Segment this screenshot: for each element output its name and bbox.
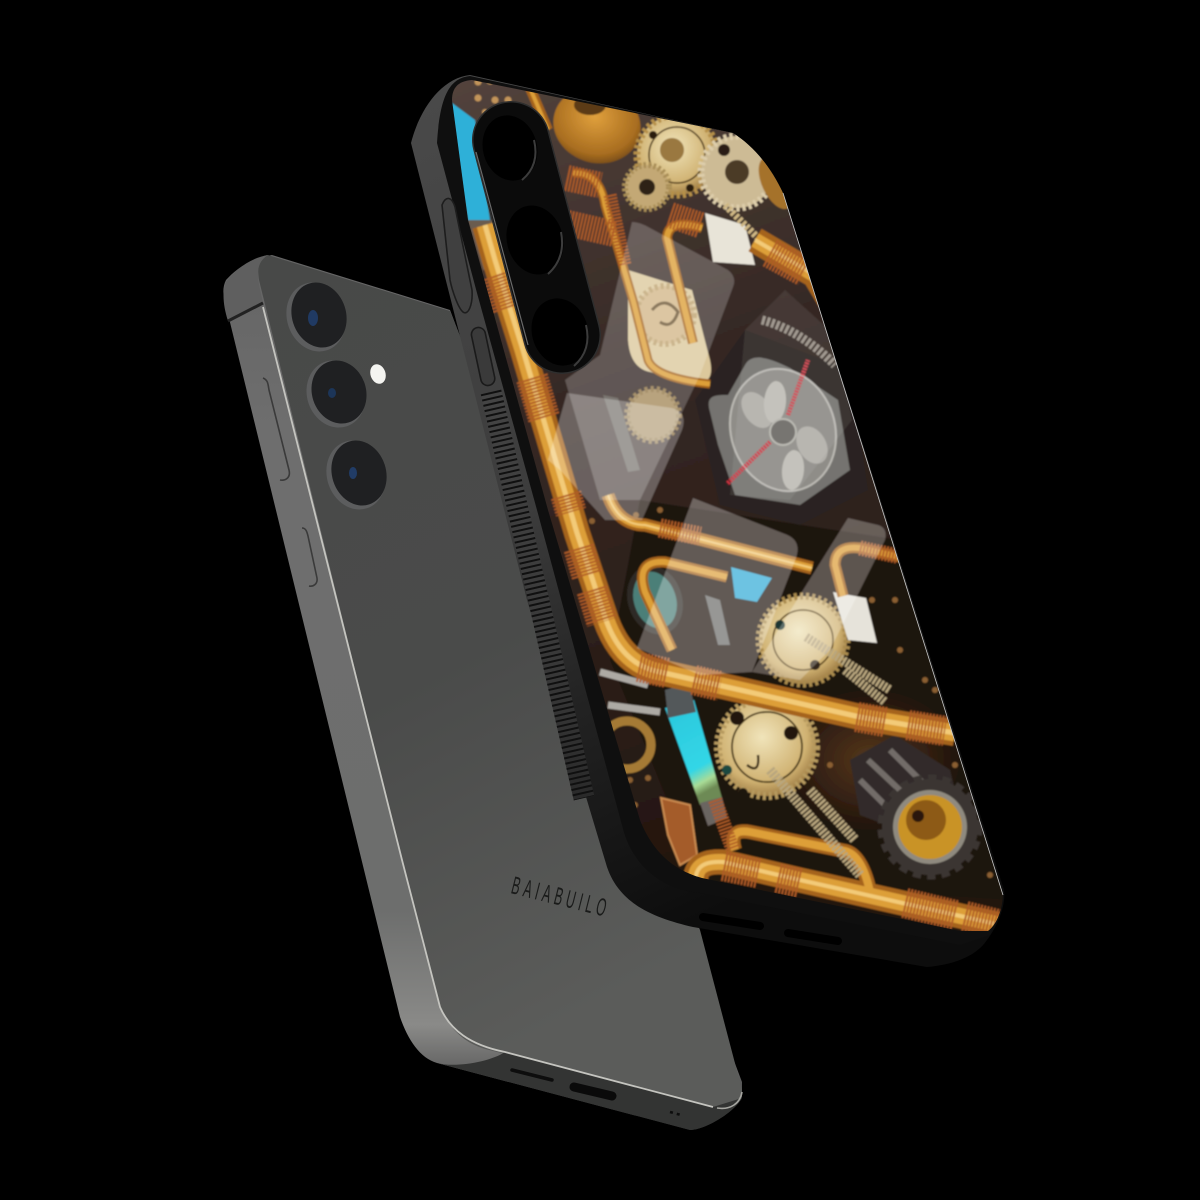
volume key — [263, 378, 289, 480]
antenna band — [228, 303, 263, 321]
small rivets top — [474, 80, 512, 114]
camera island — [475, 109, 596, 372]
upper right reflection — [730, 290, 852, 500]
camera lens 3 — [318, 433, 395, 517]
wheel spokes — [860, 750, 925, 815]
top frame corner shade — [224, 255, 268, 321]
corner gold patch — [758, 159, 788, 210]
small gear — [625, 165, 669, 209]
gear under reflection — [627, 389, 679, 441]
pipe highlight — [485, 225, 1005, 926]
fan — [728, 367, 838, 493]
fan housing shadow — [698, 331, 850, 526]
green mesh — [626, 567, 683, 634]
metal edge highlight — [263, 307, 713, 1107]
island left highlight — [476, 152, 528, 345]
camera hole 1 — [475, 109, 545, 187]
cream plate — [628, 270, 711, 383]
cream plate gear — [636, 286, 694, 344]
camera lens 1 — [278, 275, 355, 359]
white chip lower — [833, 592, 877, 643]
right phone: case front — [411, 70, 1030, 967]
artwork base — [452, 80, 1002, 931]
phone frame side — [223, 255, 742, 1130]
pipe mid tone — [485, 88, 1005, 926]
lower gear — [718, 698, 816, 798]
left phone: rear view — [223, 255, 742, 1130]
gold dome — [552, 98, 642, 164]
metal corner highlight — [717, 1092, 742, 1108]
charging port — [574, 1087, 612, 1096]
flash — [368, 362, 388, 386]
cyan strip top-left — [448, 100, 490, 220]
warm glow lower right — [799, 696, 953, 824]
product scene — [223, 75, 1004, 1130]
camera hole 3 — [524, 292, 596, 372]
red wire lower — [727, 442, 770, 484]
glass artwork — [452, 80, 1003, 931]
brand wordmark: BAIABUILO — [509, 872, 609, 923]
top gear — [637, 115, 717, 195]
grey strip below cyan — [468, 219, 492, 270]
screws — [589, 507, 993, 878]
camera hole 2 — [498, 199, 572, 281]
cream plate swirl — [652, 303, 678, 324]
case bumper — [411, 75, 1004, 967]
glass reflection 4 — [752, 518, 886, 680]
power key — [302, 528, 317, 586]
glass reflection 2 — [548, 393, 684, 520]
pencil springs — [770, 637, 890, 875]
gear wheel — [882, 779, 978, 875]
ribbed grip — [491, 392, 584, 798]
speaker slot — [512, 1070, 552, 1080]
bottom edge face — [437, 1052, 742, 1130]
glass edge line — [783, 193, 1003, 895]
button cut-out lower — [470, 326, 496, 387]
camera lens 2 — [298, 353, 375, 435]
chain top right — [722, 202, 758, 240]
dark wheel — [850, 736, 954, 822]
back panel — [258, 255, 742, 1108]
copper badge — [661, 798, 697, 865]
glass reflection 1 — [565, 222, 734, 500]
glass reflection 3 — [637, 498, 798, 675]
button cut-out upper — [442, 198, 472, 313]
gold ring left — [603, 721, 651, 769]
bottom cut-out 1 — [703, 917, 760, 926]
red wire upper — [788, 360, 808, 415]
metal bracket under reflection — [603, 395, 640, 472]
dome centre — [573, 101, 606, 116]
cyan glass tube — [665, 683, 727, 826]
rear gear centre — [759, 596, 847, 684]
cyan chip — [731, 567, 772, 602]
dark lower plate — [610, 500, 1010, 900]
inner black rim — [437, 76, 1004, 945]
bottom cut-out 2 — [788, 933, 838, 941]
upper-right gear — [701, 136, 773, 208]
copper coils — [491, 178, 1005, 926]
pipe outer tone — [485, 88, 1005, 926]
hatched bracket — [705, 595, 730, 645]
grey tube links — [600, 672, 660, 712]
fan bracket — [709, 358, 850, 505]
microphone holes — [670, 1112, 681, 1115]
chain above fan — [762, 320, 835, 365]
white chip top — [705, 213, 755, 265]
